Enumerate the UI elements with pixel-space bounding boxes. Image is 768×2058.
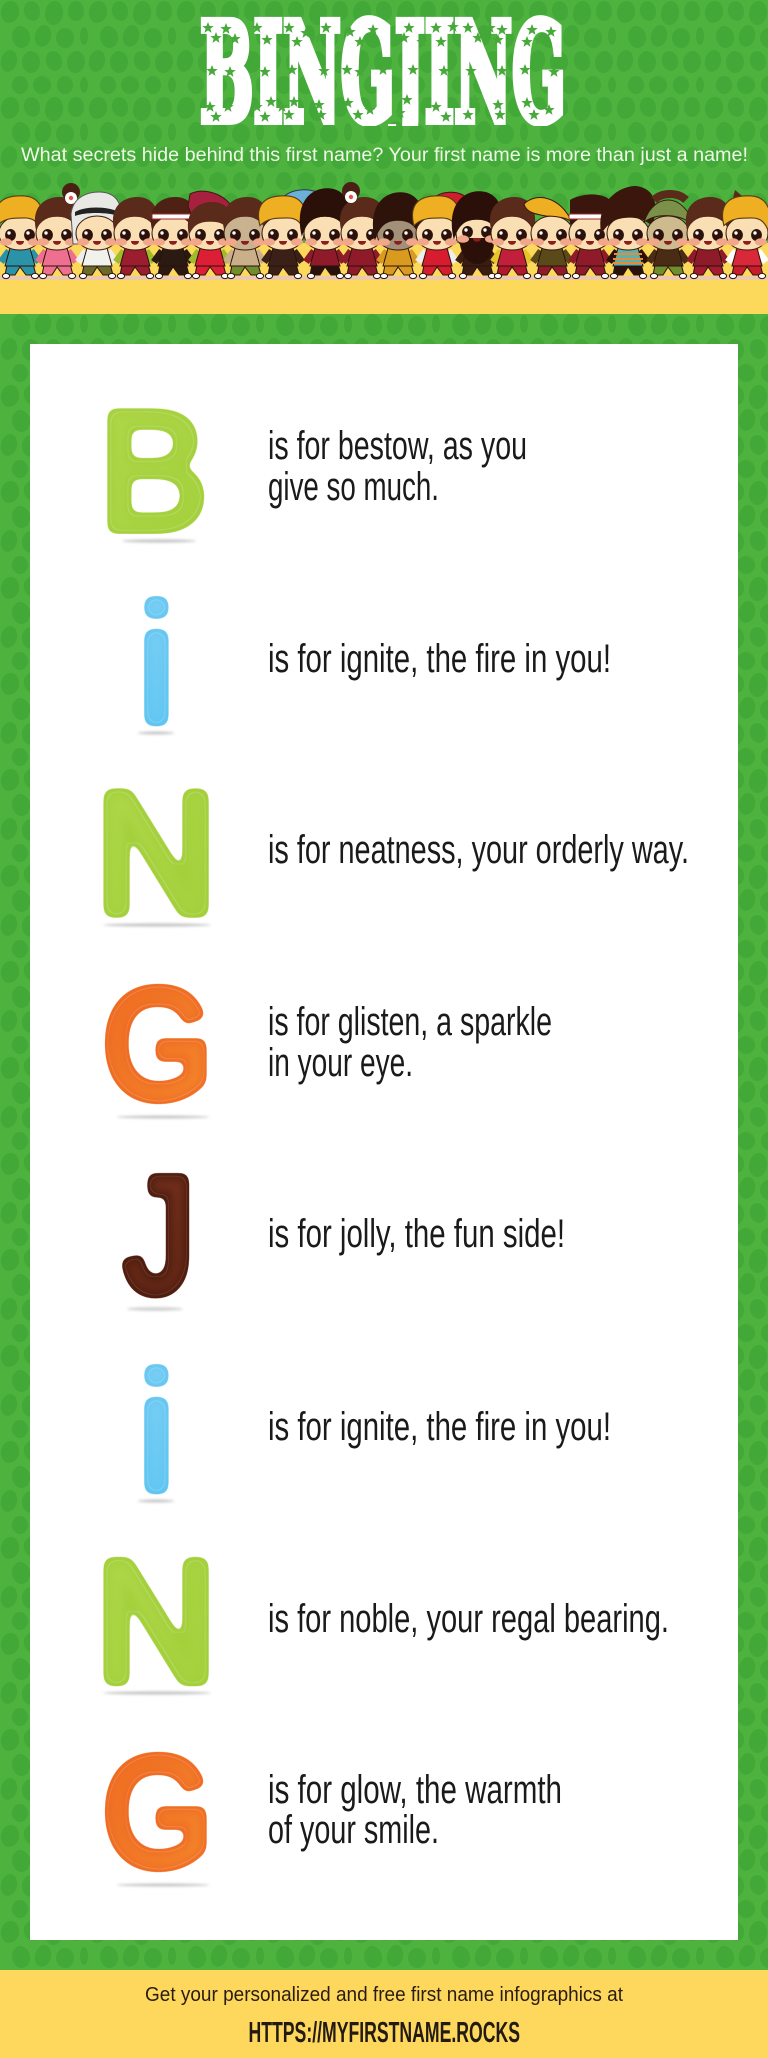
letter row: N: N [96,758,216,948]
yellow band [0,243,768,314]
letter row: G: in your eye. [268,1041,413,1085]
letter row: I (second): is for ignite, the fire in you! [268,1405,611,1449]
letter row: N (second) [96,1526,669,1716]
letter row: J: J [124,1145,194,1326]
footer band [0,1970,768,2058]
letter row: G (second): G [103,1727,212,1898]
letter row: B: give so much. [268,465,439,509]
letter row: G: is for glisten, a sparkle [268,1000,552,1044]
letter row: I (second): i [137,1339,176,1526]
letter row: J [124,1145,565,1326]
letter row: B [98,376,527,566]
illustration: row of children holding hands [0,182,768,280]
footer text: Get your personalized and free first name infographics at [145,1984,623,2006]
letter row: I [137,571,611,758]
letter row: G: G [103,959,212,1130]
letter row: I: is for ignite, the fire in you! [268,637,611,681]
panel: letters [30,344,738,1940]
footer url: HTTPS://MYFIRSTNAME.ROCKS [248,2017,520,2049]
letter row: G [103,959,552,1130]
letter row: I: i [137,571,176,758]
letter row: B: B [98,376,209,566]
letter row: I (second) [137,1339,611,1526]
title [200,15,564,126]
letter row: N (second): N [96,1526,216,1716]
letter row: B: is for bestow, as you [268,424,527,468]
letter row: J: is for jolly, the fun side! [268,1212,565,1256]
subtitle: What secrets hide behind this first name? Your first name is more than just a name! [21,145,748,166]
letter row: G (second) [103,1727,562,1898]
letter row: G (second): is for glow, the warmth [268,1768,562,1812]
letter row: N [96,758,689,948]
letter row: G (second): of your smile. [268,1808,439,1852]
